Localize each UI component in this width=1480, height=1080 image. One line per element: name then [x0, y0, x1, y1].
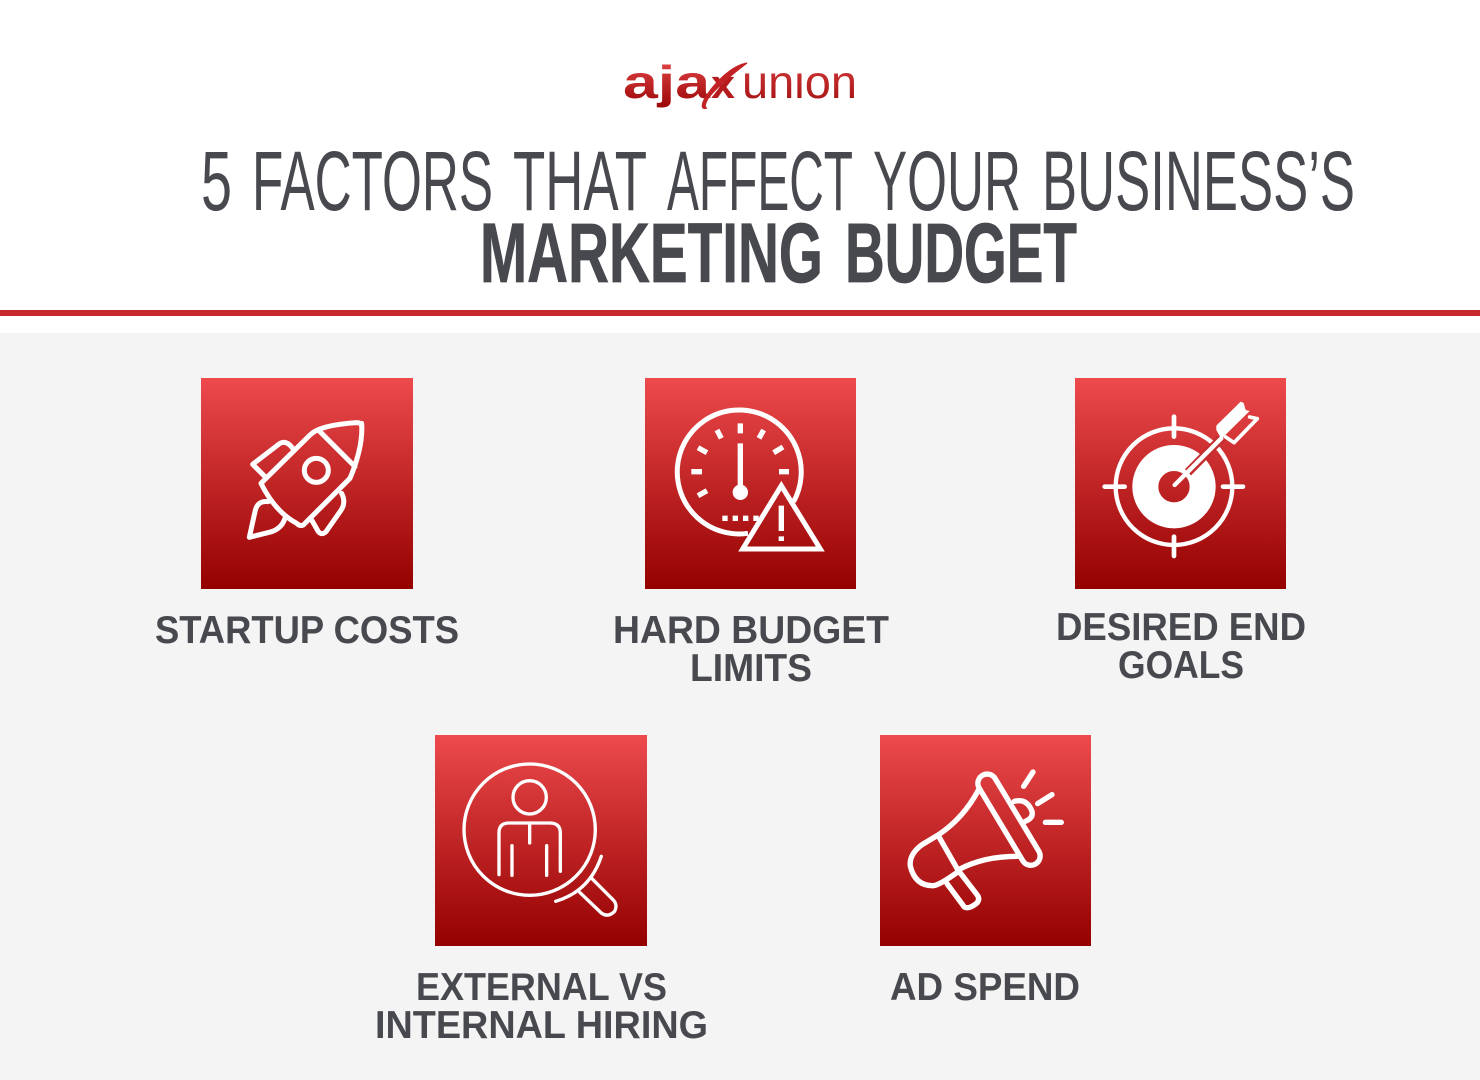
label: GOALS	[1118, 644, 1244, 687]
icon: target with arrow	[1105, 402, 1257, 556]
card: external vs internal hiring	[375, 735, 708, 1047]
title: THAT	[513, 134, 647, 228]
title: FACTORS	[252, 134, 493, 228]
logo: Ajax Union	[623, 56, 857, 109]
tile	[201, 378, 413, 589]
card: ad spend	[880, 735, 1091, 1009]
tile	[1075, 378, 1286, 589]
title: YOUR	[873, 134, 1021, 228]
label: HARD BUDGET	[613, 609, 889, 652]
label: EXTERNAL VS	[416, 966, 667, 1009]
label: DESIRED END	[1056, 606, 1306, 649]
label	[613, 609, 889, 690]
logo: Ajax Union: union	[742, 56, 857, 108]
label: STARTUP COSTS	[155, 609, 459, 652]
tile	[435, 735, 647, 946]
card: desired end goals	[1056, 378, 1306, 687]
label	[375, 966, 708, 1047]
card: startup costs	[155, 378, 459, 652]
tile	[645, 378, 856, 589]
icon: person in magnifier	[464, 764, 616, 915]
label	[1056, 606, 1306, 687]
logo: Ajax Union: x	[711, 63, 735, 107]
panel: factors background	[0, 333, 1480, 1080]
tile	[880, 735, 1091, 946]
card: hard budget limits	[613, 378, 889, 690]
title: MARKETING	[480, 206, 823, 300]
label: INTERNAL HIRING	[375, 1004, 708, 1047]
icon: megaphone	[910, 771, 1061, 908]
label: AD SPEND	[890, 966, 1080, 1009]
title: AFFECT	[667, 134, 853, 228]
title: BUDGET	[845, 206, 1077, 300]
icon: gauge with warning triangle	[677, 410, 820, 549]
red divider rule	[0, 310, 1480, 316]
label: LIMITS	[690, 647, 812, 690]
title	[201, 134, 1355, 300]
icon: rocket	[249, 423, 362, 537]
logo: Ajax Union: aja	[623, 56, 711, 108]
title: 5	[201, 134, 232, 228]
